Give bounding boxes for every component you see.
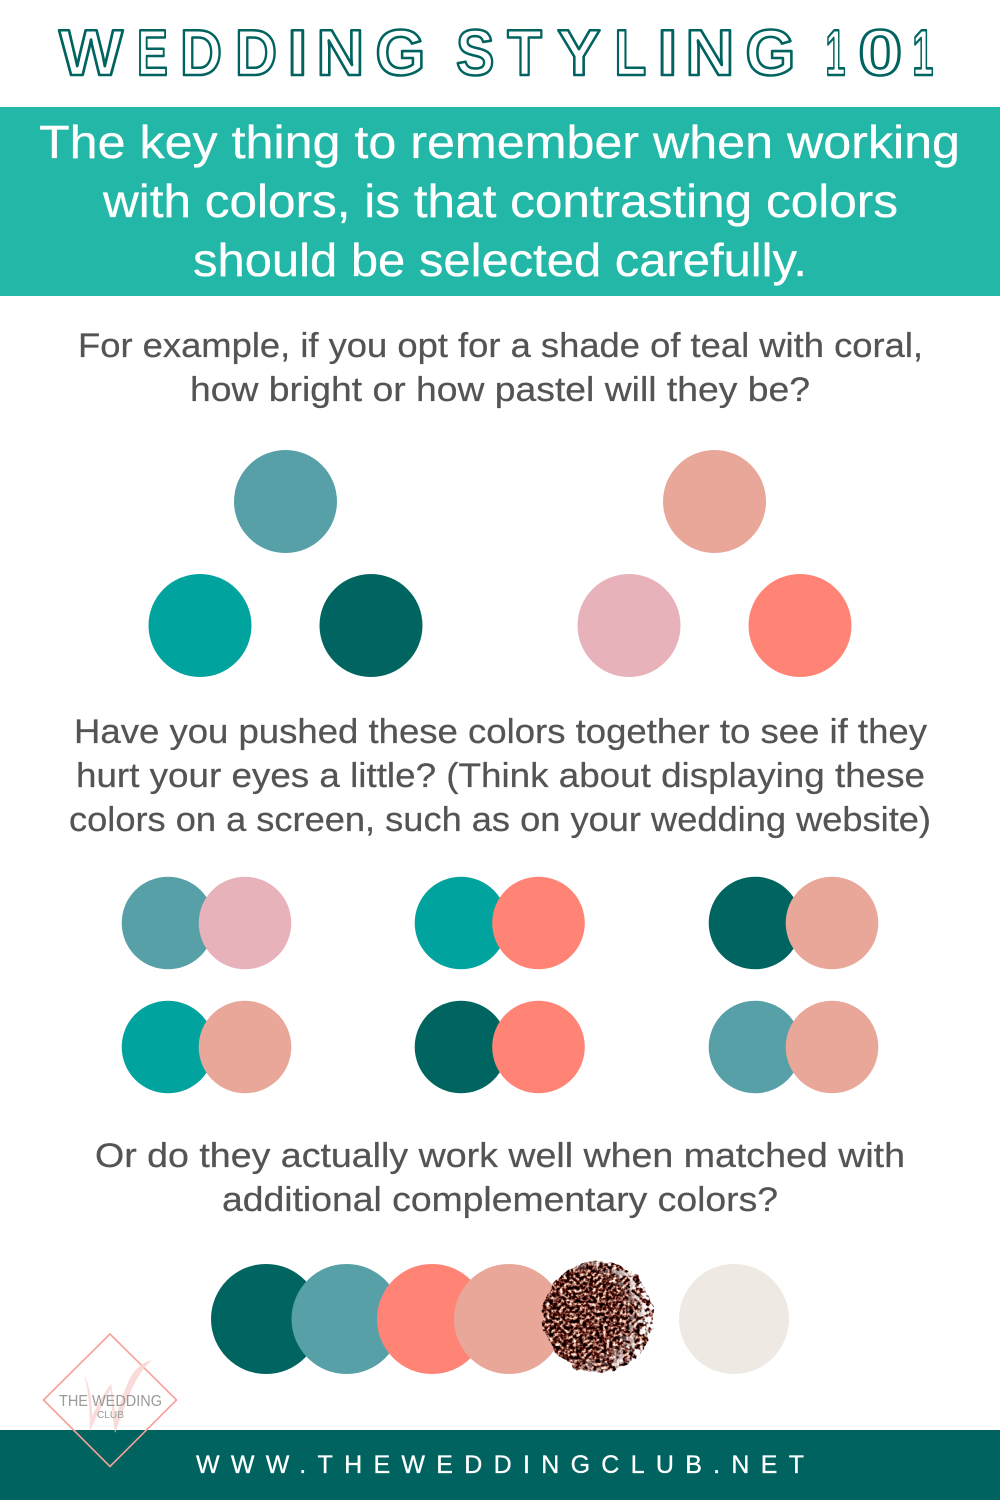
text block: teal with coral question: how bright or how pastel will they be? [190,371,810,409]
swatch: rose gold glitter [541,1260,654,1374]
swatch: ivory [679,1264,789,1374]
title: N [685,16,735,89]
title: I [657,16,678,89]
text block: pushed together question: hurt your eyes a little? (Think about displaying these [76,757,925,795]
final palette row [211,1260,789,1374]
banner: key message: should be selected carefully. [193,234,807,286]
text block: complementary colors question [95,1137,905,1219]
logo: The Wedding Club: THE WEDDING [59,1393,162,1410]
text block: complementary colors question: Or do they actually work well when matched with [95,1137,905,1175]
text block: complementary colors question: additional complementary colors? [222,1181,778,1219]
logo: The Wedding Club [44,1334,176,1466]
title: 1 [826,16,845,89]
title: 1 [912,16,933,89]
footer bar [0,1430,1000,1500]
title: Y [557,16,601,89]
title: G [375,16,425,89]
title: G [745,16,795,89]
pair: bright teal and coral [415,877,585,969]
text block: teal with coral question: For example, if you opt for a shade of teal with coral, [78,327,923,365]
title: 0 [858,16,902,89]
title: S [456,16,494,89]
text block: pushed together question: Have you pushed these colors together to see if they [74,713,927,751]
swatches: coral shades [578,450,852,677]
title: D [235,16,277,89]
title [59,16,933,89]
banner: key message [0,107,1000,296]
title: L [614,16,646,89]
text block: teal with coral question [78,327,923,409]
banner: key message: with colors, is that contrasting colors [102,175,898,227]
pair: dark teal and coral [415,1001,585,1093]
text block: pushed together question: colors on a screen, such as on your wedding website) [69,801,931,839]
pair: dark teal and salmon [709,877,878,969]
pair: muted teal and salmon [709,1001,878,1093]
banner: key message: The key thing to remember when working [39,116,960,168]
swatches: teal shades [148,450,422,677]
footer bar: WWW.THEWEDDINGCLUB.NET [196,1451,804,1479]
text block: pushed together question [69,713,931,839]
title: N [316,16,364,89]
title: I [287,16,308,89]
title: W [59,16,124,89]
pair: muted teal and pink [122,877,291,969]
title: D [180,16,222,89]
logo: The Wedding Club: CLUB [97,1410,124,1421]
title: T [507,16,542,89]
pair: bright teal and salmon [122,1001,291,1093]
color pairs grid [122,877,878,1093]
title: E [137,16,168,89]
